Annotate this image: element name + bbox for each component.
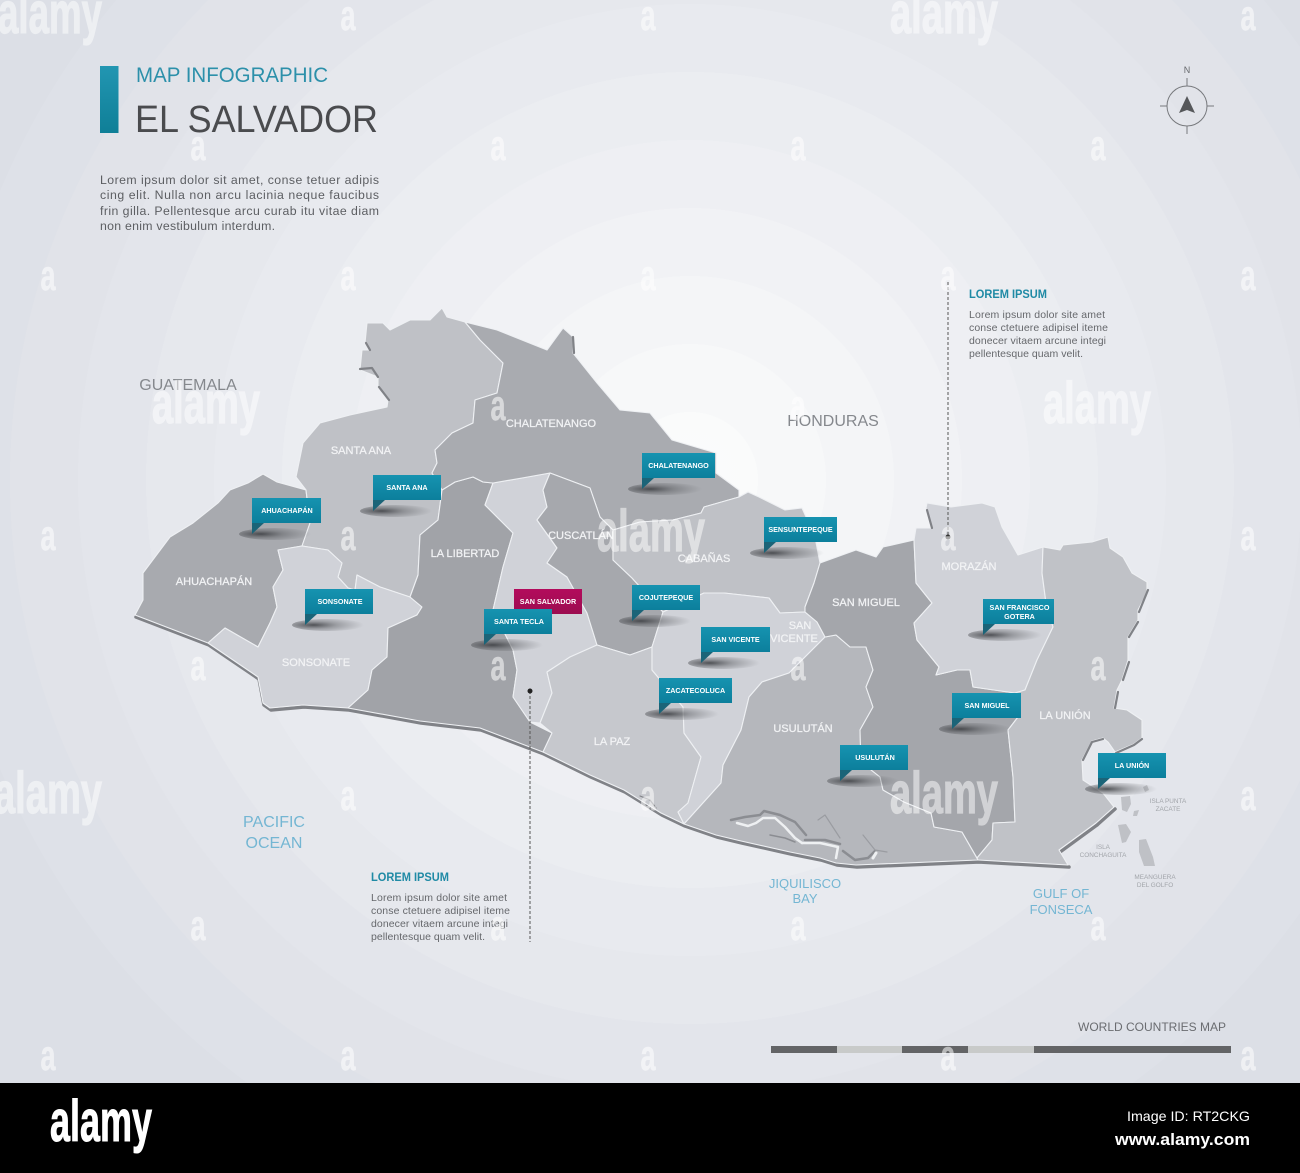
pin: Zacatecoluca — [645, 678, 732, 720]
watermarks: a — [640, 252, 656, 300]
pin: Ahuachapan: AHUACHAPÁN — [261, 506, 313, 515]
pin: San Vicente: SAN VICENTE — [711, 635, 760, 644]
watermarks: a — [190, 642, 206, 690]
pin: Sonsonate — [292, 589, 373, 631]
neighbouring countries and water labels: BAY — [792, 891, 818, 906]
pin: Santa Tecla — [471, 609, 552, 651]
map labels: LA LIBERTAD — [431, 548, 499, 560]
watermarks: a — [490, 122, 506, 170]
coastal shading details — [360, 337, 1148, 808]
neighbouring countries and water labels: GUATEMALA — [139, 377, 237, 394]
neighbouring countries and water labels: JIQUILISCO — [769, 876, 841, 891]
callout: bottom: Lorem ipsum dolor site amet — [371, 892, 507, 904]
intro paragraph: Lorem ipsum dolor sit amet, conse tetuer adipis — [100, 173, 379, 187]
watermarks: a — [940, 512, 956, 560]
map labels: LA UNIÓN — [1039, 709, 1091, 722]
pin: Zacatecoluca: ZACATECOLUCA — [666, 686, 725, 695]
map labels: LA PAZ — [594, 736, 631, 748]
callout: top right: pellentesque quam velit. — [969, 348, 1083, 360]
watermarks: a — [340, 1032, 356, 1080]
pin: Santa Ana — [360, 475, 441, 517]
map labels: SANTA ANA — [331, 445, 392, 457]
map labels: CHALATENANGO — [506, 418, 597, 430]
pin: San Salvador capital — [514, 589, 582, 614]
region: La Libertad — [348, 477, 552, 752]
intro paragraph — [100, 173, 379, 233]
neighbouring countries and water labels: PACIFIC — [243, 814, 305, 831]
watermarks: alamy — [597, 499, 705, 564]
callout: top right: LOREM IPSUM — [969, 289, 1047, 301]
pin: Santa Tecla: SANTA TECLA — [494, 617, 544, 626]
compass: N — [1184, 65, 1190, 75]
map labels — [176, 418, 1091, 748]
pin: Sensuntepeque: SENSUNTEPEQUE — [768, 525, 833, 534]
pin: Chalatenango: CHALATENANGO — [648, 461, 709, 470]
region: Ahuachapan — [135, 474, 310, 647]
region: Chalatenango — [432, 322, 739, 530]
pin: Ahuachapan — [239, 498, 321, 540]
map labels: CUSCATLÁN — [548, 529, 614, 542]
watermarks: a — [940, 1032, 956, 1080]
islands — [1118, 785, 1155, 866]
callout: bottom: pellentesque quam velit. — [371, 931, 485, 943]
title: El Salvador: EL SALVADOR — [135, 99, 378, 141]
title: map infographic: MAP INFOGRAPHIC — [136, 64, 328, 87]
region: San Miguel — [805, 540, 1018, 858]
neighbouring countries and water labels: ISLA PUNTA — [1150, 798, 1187, 805]
neighbouring countries and water labels: CONCHAGUITA — [1080, 852, 1127, 859]
watermarks: a — [190, 122, 206, 170]
watermarks: a — [490, 382, 506, 430]
neighbouring countries and water labels: FONSECA — [1030, 902, 1093, 917]
footer website: www.alamy.com — [1114, 1130, 1250, 1149]
watermarks: a — [40, 252, 56, 300]
pin: San Vicente — [688, 627, 770, 669]
pin: San Miguel — [939, 693, 1021, 735]
pin: San Miguel: SAN MIGUEL — [964, 701, 1010, 710]
callout: bottom: donecer vitaem arcune integi — [371, 918, 508, 930]
neighbouring countries and water labels: GULF OF — [1033, 886, 1089, 901]
watermarks: a — [640, 772, 656, 820]
pin: Usulutan — [827, 745, 908, 787]
watermarks: a — [790, 902, 806, 950]
map labels: MORAZÁN — [942, 560, 997, 573]
intro paragraph: non enim vestibulum interdum. — [100, 219, 275, 233]
watermarks: a — [40, 512, 56, 560]
watermarks: a — [340, 252, 356, 300]
map labels: VICENTE — [770, 633, 818, 645]
region: La Paz — [540, 645, 701, 824]
pin: San Francisco Gotera: GOTERA — [1004, 612, 1035, 621]
watermarks: a — [340, 512, 356, 560]
region: Sonsonate — [208, 546, 422, 708]
map labels: USULUTÁN — [773, 722, 833, 735]
map labels: SONSONATE — [282, 657, 350, 669]
watermarks: a — [340, 772, 356, 820]
region: Cuscatlan — [537, 473, 663, 655]
pin: Sonsonate: SONSONATE — [318, 597, 363, 606]
pin: Chalatenango — [628, 453, 715, 495]
region: San Vicente — [652, 593, 825, 824]
pin: San Francisco Gotera: SAN FRANCISCO — [990, 603, 1050, 612]
scale caption: WORLD COUNTRIES MAP — [1078, 1020, 1226, 1034]
neighbouring countries and water labels: MEANGUERA — [1134, 874, 1176, 881]
pin: Usulutan: USULUTÁN — [855, 753, 895, 762]
neighbouring countries and water labels: HONDURAS — [787, 413, 879, 430]
neighbouring countries and water labels: OCEAN — [246, 835, 302, 852]
map labels: SAN MIGUEL — [832, 597, 900, 609]
scale bar — [771, 1046, 1231, 1053]
pin: Santa Ana: SANTA ANA — [386, 483, 428, 492]
region: Cabanas — [613, 492, 820, 613]
region: San Salvador — [485, 473, 597, 723]
watermarks: a — [1240, 1032, 1256, 1080]
region: Usulutan — [684, 635, 978, 865]
neighbouring countries and water labels: ZACATE — [1156, 806, 1180, 813]
map labels: SAN — [789, 620, 811, 632]
region: Santa Ana — [296, 308, 503, 597]
pin: La Union — [1085, 753, 1166, 795]
callout: top right: conse ctetuere adipisel iteme — [969, 322, 1108, 334]
watermarks: a — [790, 122, 806, 170]
callout: top right — [946, 282, 1108, 540]
watermarks: a — [1240, 772, 1256, 820]
neighbouring countries and water labels — [139, 377, 1187, 917]
neighbouring countries and water labels: DEL GOLFO — [1137, 882, 1173, 889]
neighbouring countries and water labels: ISLA — [1096, 844, 1111, 851]
map labels: AHUACHAPÁN — [176, 575, 252, 588]
watermarks: a — [940, 252, 956, 300]
callout: top right: donecer vitaem arcune integi — [969, 335, 1106, 347]
watermarks: a — [790, 642, 806, 690]
watermarks: a — [1090, 642, 1106, 690]
map labels: CABAÑAS — [678, 552, 730, 565]
pin: San Salvador capital: SAN SALVADOR — [520, 597, 577, 606]
watermarks: a — [640, 1032, 656, 1080]
watermarks: alamy — [890, 761, 998, 826]
footer image id: Image ID: RT2CKG — [1127, 1108, 1250, 1124]
intro paragraph: cing elit. Nulla non arcu lacinia neque faucibus — [100, 188, 379, 202]
pin: Cojutepeque: COJUTEPEQUE — [639, 593, 693, 602]
coast shadow — [136, 617, 1115, 867]
region: La Union — [977, 537, 1147, 865]
callout: bottom: conse ctetuere adipisel iteme — [371, 905, 510, 917]
compass — [1160, 65, 1214, 134]
watermarks: a — [190, 902, 206, 950]
callout: bottom: LOREM IPSUM — [371, 872, 449, 884]
watermarks: a — [1240, 512, 1256, 560]
footer bar — [0, 1083, 1300, 1173]
region: Morazan — [914, 503, 1053, 693]
pin: La Union: LA UNIÓN — [1115, 761, 1149, 770]
watermarks: a — [790, 382, 806, 430]
footer logo: alamy — [50, 1089, 152, 1154]
Jiquilisco lagoon — [731, 811, 887, 860]
watermarks: a — [40, 1032, 56, 1080]
intro paragraph: frin gilla. Pellentesque arcu curab itu vitae diam — [100, 204, 379, 218]
watermarks: a — [1090, 902, 1106, 950]
watermarks: a — [1240, 252, 1256, 300]
watermarks: alamy — [152, 371, 260, 436]
map: El Salvador departments — [135, 308, 1155, 867]
watermarks: alamy — [1043, 371, 1151, 436]
title accent bar — [100, 66, 118, 133]
pin: Sensuntepeque — [750, 517, 837, 559]
watermarks: a — [490, 642, 506, 690]
pin: San Francisco Gotera — [968, 599, 1054, 641]
watermarks: a — [490, 902, 506, 950]
callout: bottom — [371, 688, 532, 943]
callout: top right: Lorem ipsum dolor site amet — [969, 309, 1105, 321]
pin: Cojutepeque — [619, 585, 700, 627]
watermarks: a — [1090, 122, 1106, 170]
